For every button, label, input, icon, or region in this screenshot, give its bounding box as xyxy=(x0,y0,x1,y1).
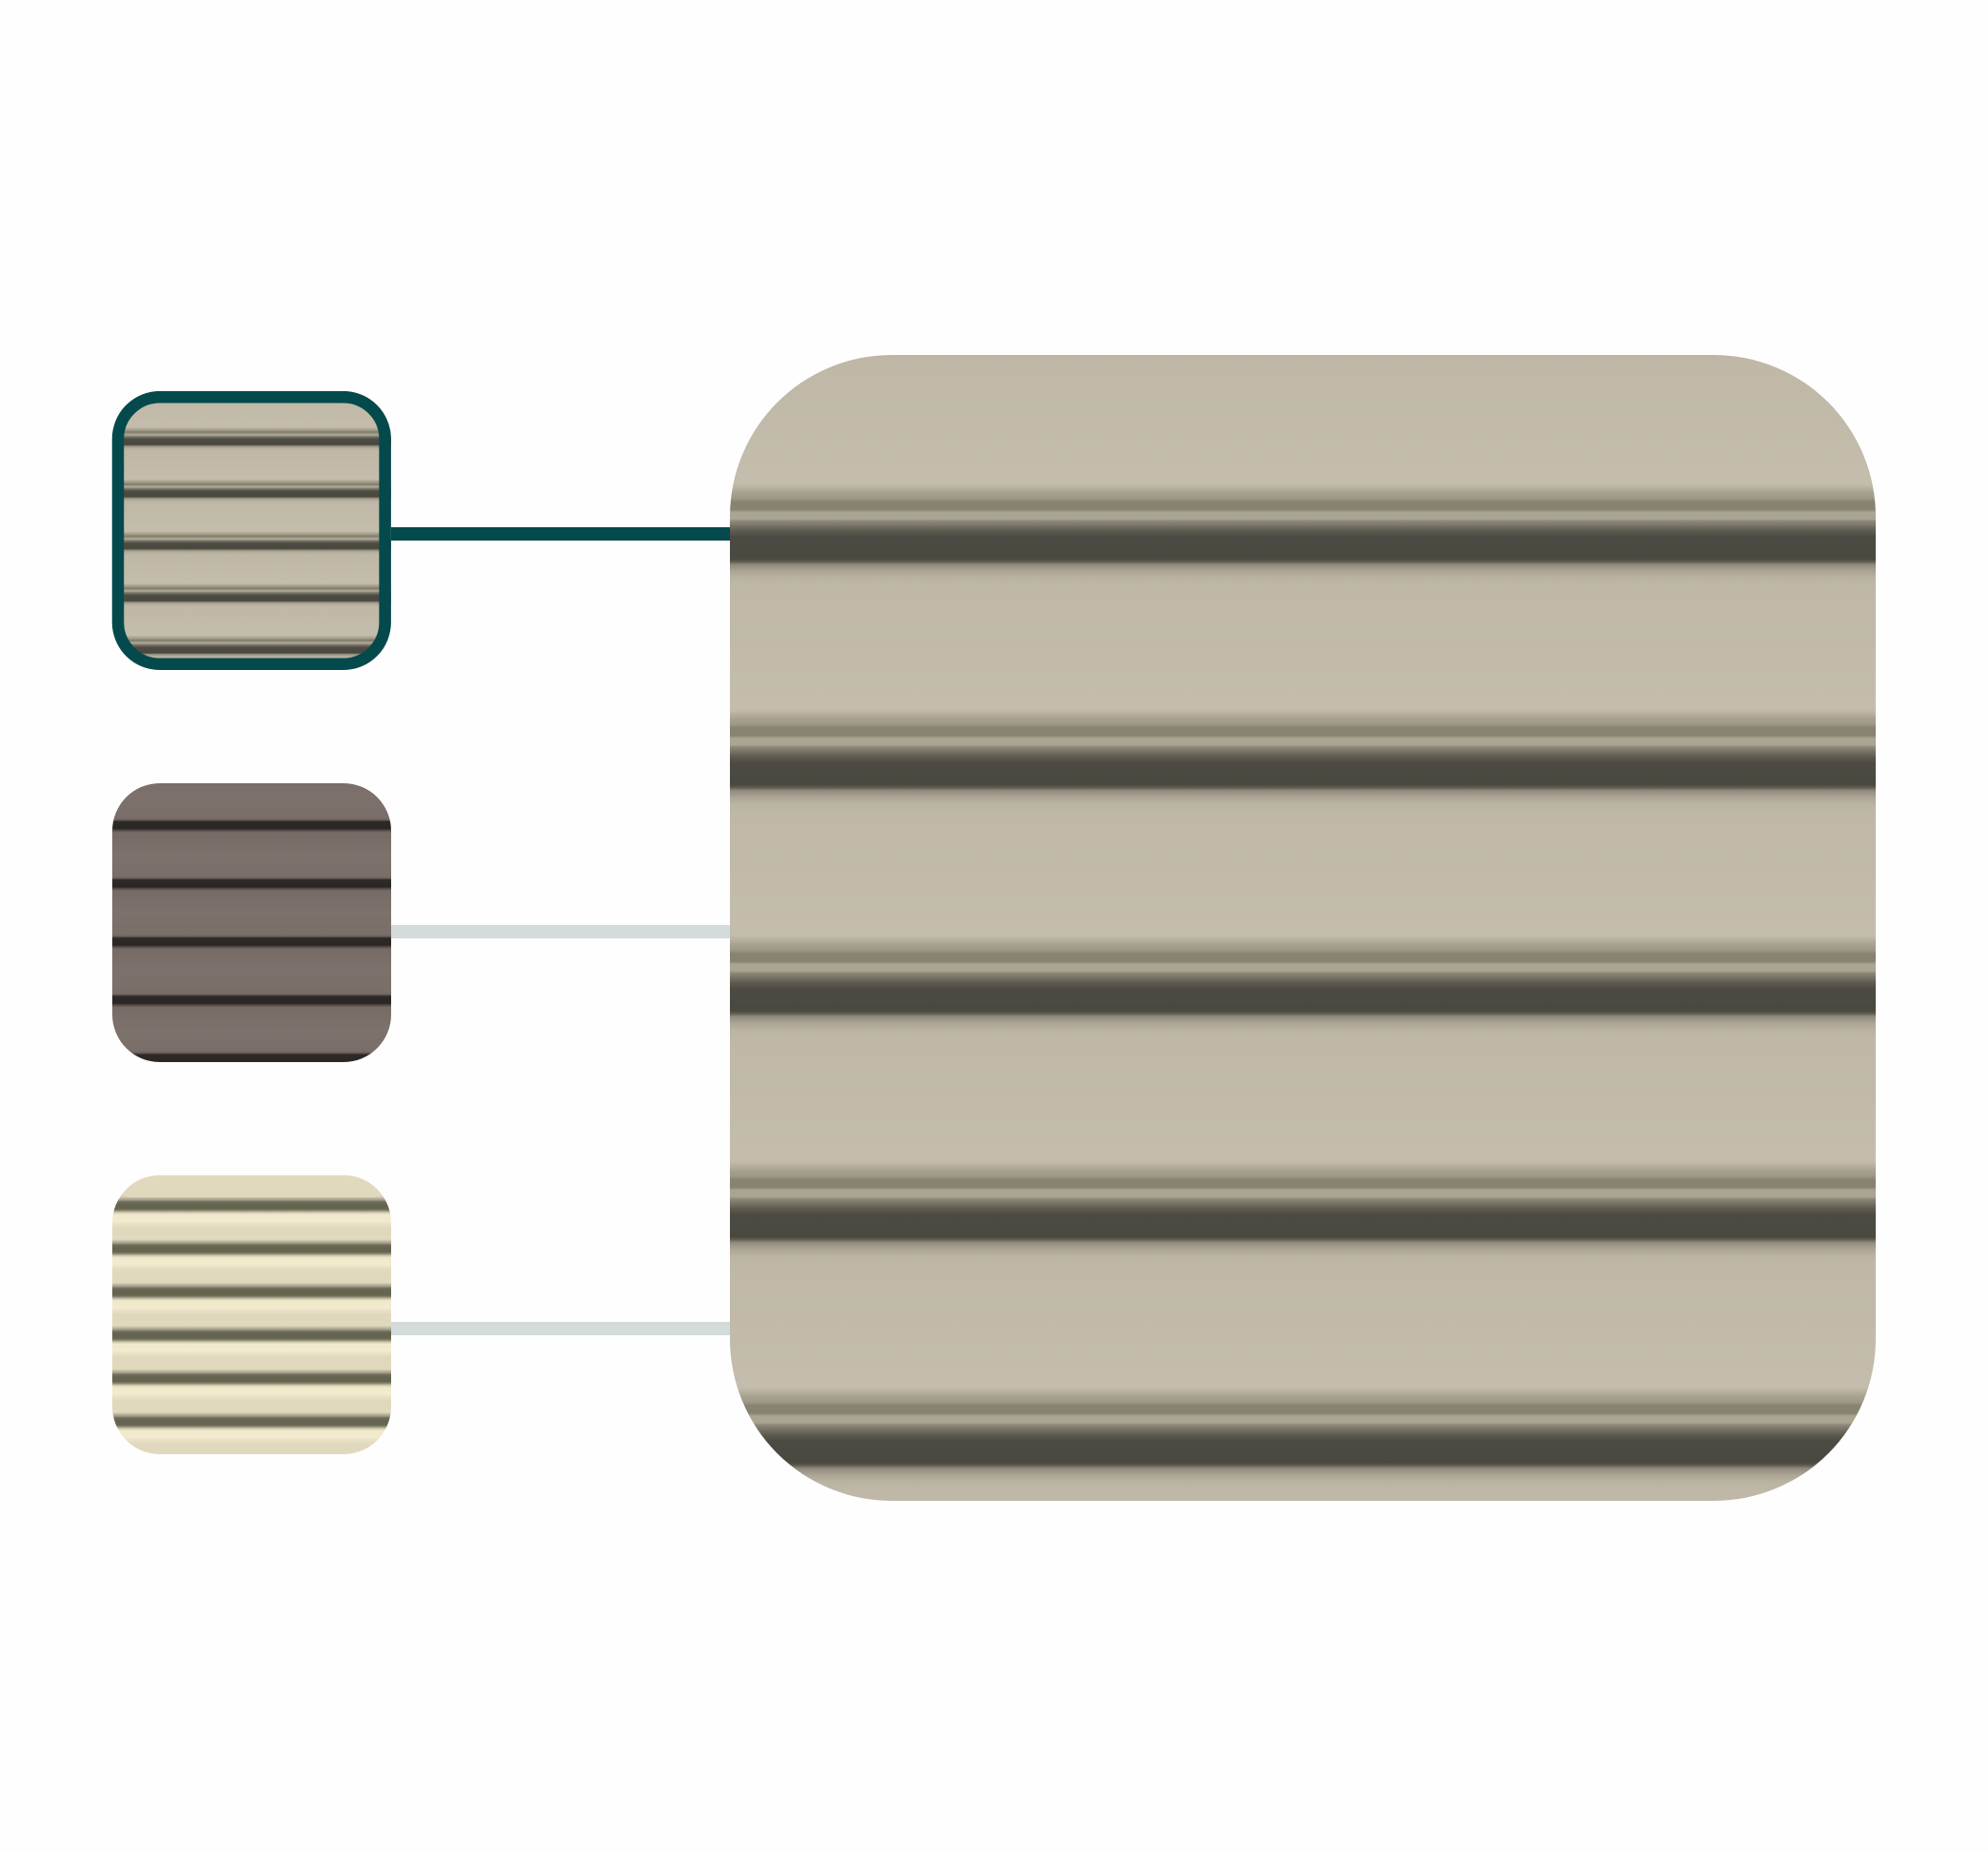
connector: brown swatch to preview xyxy=(385,925,732,938)
swatch: taupe siding (selected) xyxy=(112,391,391,670)
swatch texture: cream xyxy=(112,1175,391,1454)
large preview: taupe siding xyxy=(730,355,1876,1501)
connector: selected swatch to preview xyxy=(385,527,732,541)
swatch: cream siding xyxy=(112,1175,391,1454)
selected outline xyxy=(118,397,385,664)
swatch top edge: cream xyxy=(128,1175,376,1197)
swatch: brown siding xyxy=(112,783,391,1062)
connector: cream swatch to preview xyxy=(385,1322,732,1335)
swatch texture: taupe xyxy=(112,391,391,670)
